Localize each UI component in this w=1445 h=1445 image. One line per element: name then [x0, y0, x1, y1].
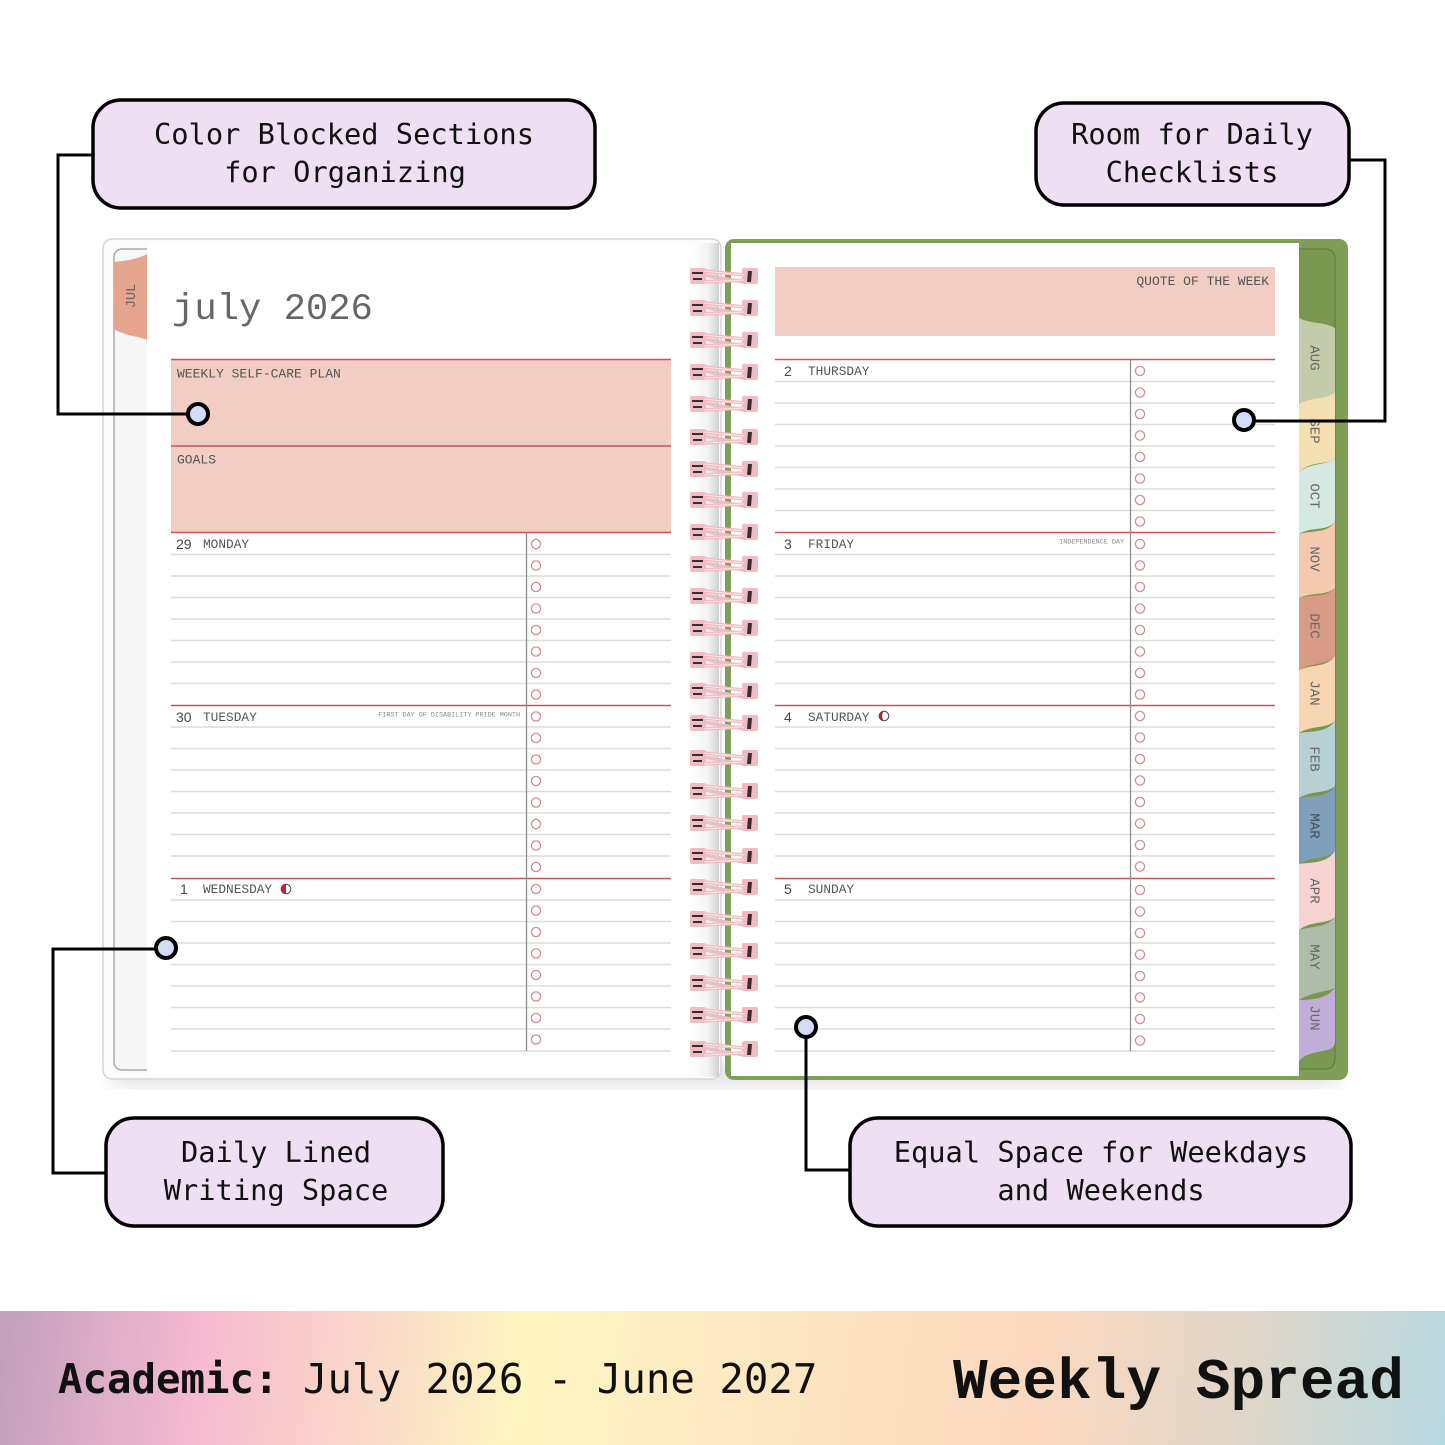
weekly spread title: Weekly Spread	[953, 1351, 1404, 1416]
tab: NOV	[1299, 522, 1335, 598]
spine shadow	[685, 243, 719, 1077]
tab: OCT: OCT	[1306, 483, 1322, 509]
callout: daily checklists	[1036, 103, 1385, 430]
leader line	[806, 1037, 850, 1170]
label text: Checklists	[1106, 155, 1278, 189]
left page sheet	[147, 243, 718, 1077]
left divider edge	[114, 249, 174, 1070]
day: Monday: MONDAY	[203, 537, 249, 552]
panel: left planner page	[103, 239, 721, 1079]
marker dot	[796, 1017, 816, 1037]
tab: SEP: SEP	[1306, 418, 1322, 444]
inner divider outline	[1270, 249, 1335, 1069]
day: Tuesday: TUESDAY	[203, 710, 257, 725]
day: Thursday	[784, 363, 870, 379]
right page sheet	[731, 243, 1299, 1076]
day: Friday	[784, 536, 1124, 552]
tab: JAN	[1299, 656, 1335, 733]
color blocks: self-care and goals: GOALS	[177, 452, 216, 468]
day: Friday: FRIDAY	[808, 537, 854, 552]
day: Saturday	[784, 709, 889, 725]
label text: Color Blocked Sections	[154, 117, 534, 151]
day: Tuesday: 30	[176, 709, 192, 725]
label text	[154, 117, 534, 189]
color blocks: self-care and goals: WEEKLY SELF-CARE PLAN	[177, 366, 341, 382]
tab: JAN: JAN	[1306, 680, 1322, 706]
tab: MAY: MAY	[1306, 944, 1322, 970]
left clear cover	[103, 239, 721, 1079]
marker dot	[156, 938, 176, 958]
label text: Equal Space for Weekdays	[894, 1135, 1308, 1169]
tab: FEB: FEB	[1306, 746, 1322, 772]
left day lines	[171, 533, 671, 1051]
left tab: JUL	[114, 254, 147, 340]
day: Wednesday	[180, 881, 291, 897]
right checklist circles	[1135, 366, 1145, 1045]
label text: for Organizing	[224, 155, 466, 189]
color blocks: self-care and goals	[171, 359, 671, 533]
month tabs	[1299, 318, 1335, 1061]
icon: crescent moon	[879, 711, 889, 721]
day: Tuesday: FIRST DAY OF DISABILITY PRIDE MONTH	[378, 712, 520, 720]
marker dot	[1234, 410, 1254, 430]
tab: JUN	[1299, 988, 1335, 1061]
label box	[106, 1118, 443, 1226]
day: Wednesday: 1	[180, 881, 188, 897]
icon: first quarter moon	[281, 884, 291, 894]
day: Sunday: 5	[784, 881, 792, 897]
leader line	[53, 949, 156, 1173]
label text: and Weekends	[997, 1173, 1205, 1207]
label box	[1036, 103, 1349, 205]
label box	[850, 1118, 1351, 1226]
label text: Daily Lined	[181, 1135, 371, 1169]
day: Wednesday: WEDNESDAY	[203, 882, 272, 897]
tab: OCT	[1299, 458, 1335, 534]
tab: MAY	[1299, 917, 1335, 1000]
callout: color blocked sections	[58, 100, 595, 424]
spiral binding	[690, 268, 758, 1057]
right day lines	[775, 360, 1275, 1051]
tab: AUG	[1299, 318, 1335, 404]
label text: Room for Daily	[1071, 117, 1313, 151]
leader line	[58, 155, 188, 414]
leader line	[1254, 160, 1385, 421]
day: Tuesday	[176, 709, 520, 725]
label text: Writing Space	[164, 1173, 388, 1207]
tab: MAR	[1299, 786, 1335, 864]
tab: FEB	[1299, 721, 1335, 798]
green cover	[725, 239, 1348, 1080]
gradient bar	[0, 1311, 1445, 1445]
label text	[894, 1135, 1308, 1207]
tab: SEP	[1299, 392, 1335, 472]
callout: lined writing space	[53, 938, 443, 1226]
left checklist circles	[531, 539, 541, 1044]
day: Thursday: 2	[784, 363, 792, 379]
panel: right planner page	[725, 239, 1348, 1080]
academic year: Academic: July 2026 - June 2027	[58, 1355, 817, 1403]
tab: APR	[1299, 851, 1335, 930]
day: Saturday: SATURDAY	[808, 710, 870, 725]
tab: AUG: AUG	[1306, 345, 1322, 371]
day: Monday: 29	[176, 536, 192, 552]
marker dot	[188, 404, 208, 424]
tab: JUN: JUN	[1306, 1005, 1322, 1031]
day: Thursday: THURSDAY	[808, 364, 870, 379]
cover shadow	[112, 1062, 1337, 1088]
footer banner	[0, 1311, 1445, 1445]
quote of the week block	[775, 267, 1275, 336]
day: Sunday: SUNDAY	[808, 882, 854, 897]
label text	[1071, 117, 1313, 189]
callout: equal space	[796, 1017, 1351, 1226]
day: Monday	[176, 536, 249, 552]
label text	[164, 1135, 388, 1207]
day: Saturday: 4	[784, 709, 792, 725]
day: Friday: INDEPENDENCE DAY	[1059, 538, 1124, 546]
day: Friday: 3	[784, 536, 792, 552]
tab: APR: APR	[1306, 878, 1322, 904]
tab: MAR: MAR	[1306, 813, 1322, 839]
month heading: july 2026	[172, 289, 373, 331]
left tab: JUL: JUL	[125, 284, 140, 308]
label box	[93, 100, 595, 208]
quote of the week block: QUOTE OF THE WEEK	[1136, 274, 1269, 289]
tab: NOV: NOV	[1306, 546, 1322, 572]
tab: DEC: DEC	[1306, 613, 1322, 639]
tab: DEC	[1299, 588, 1335, 670]
day: Sunday	[784, 881, 854, 897]
